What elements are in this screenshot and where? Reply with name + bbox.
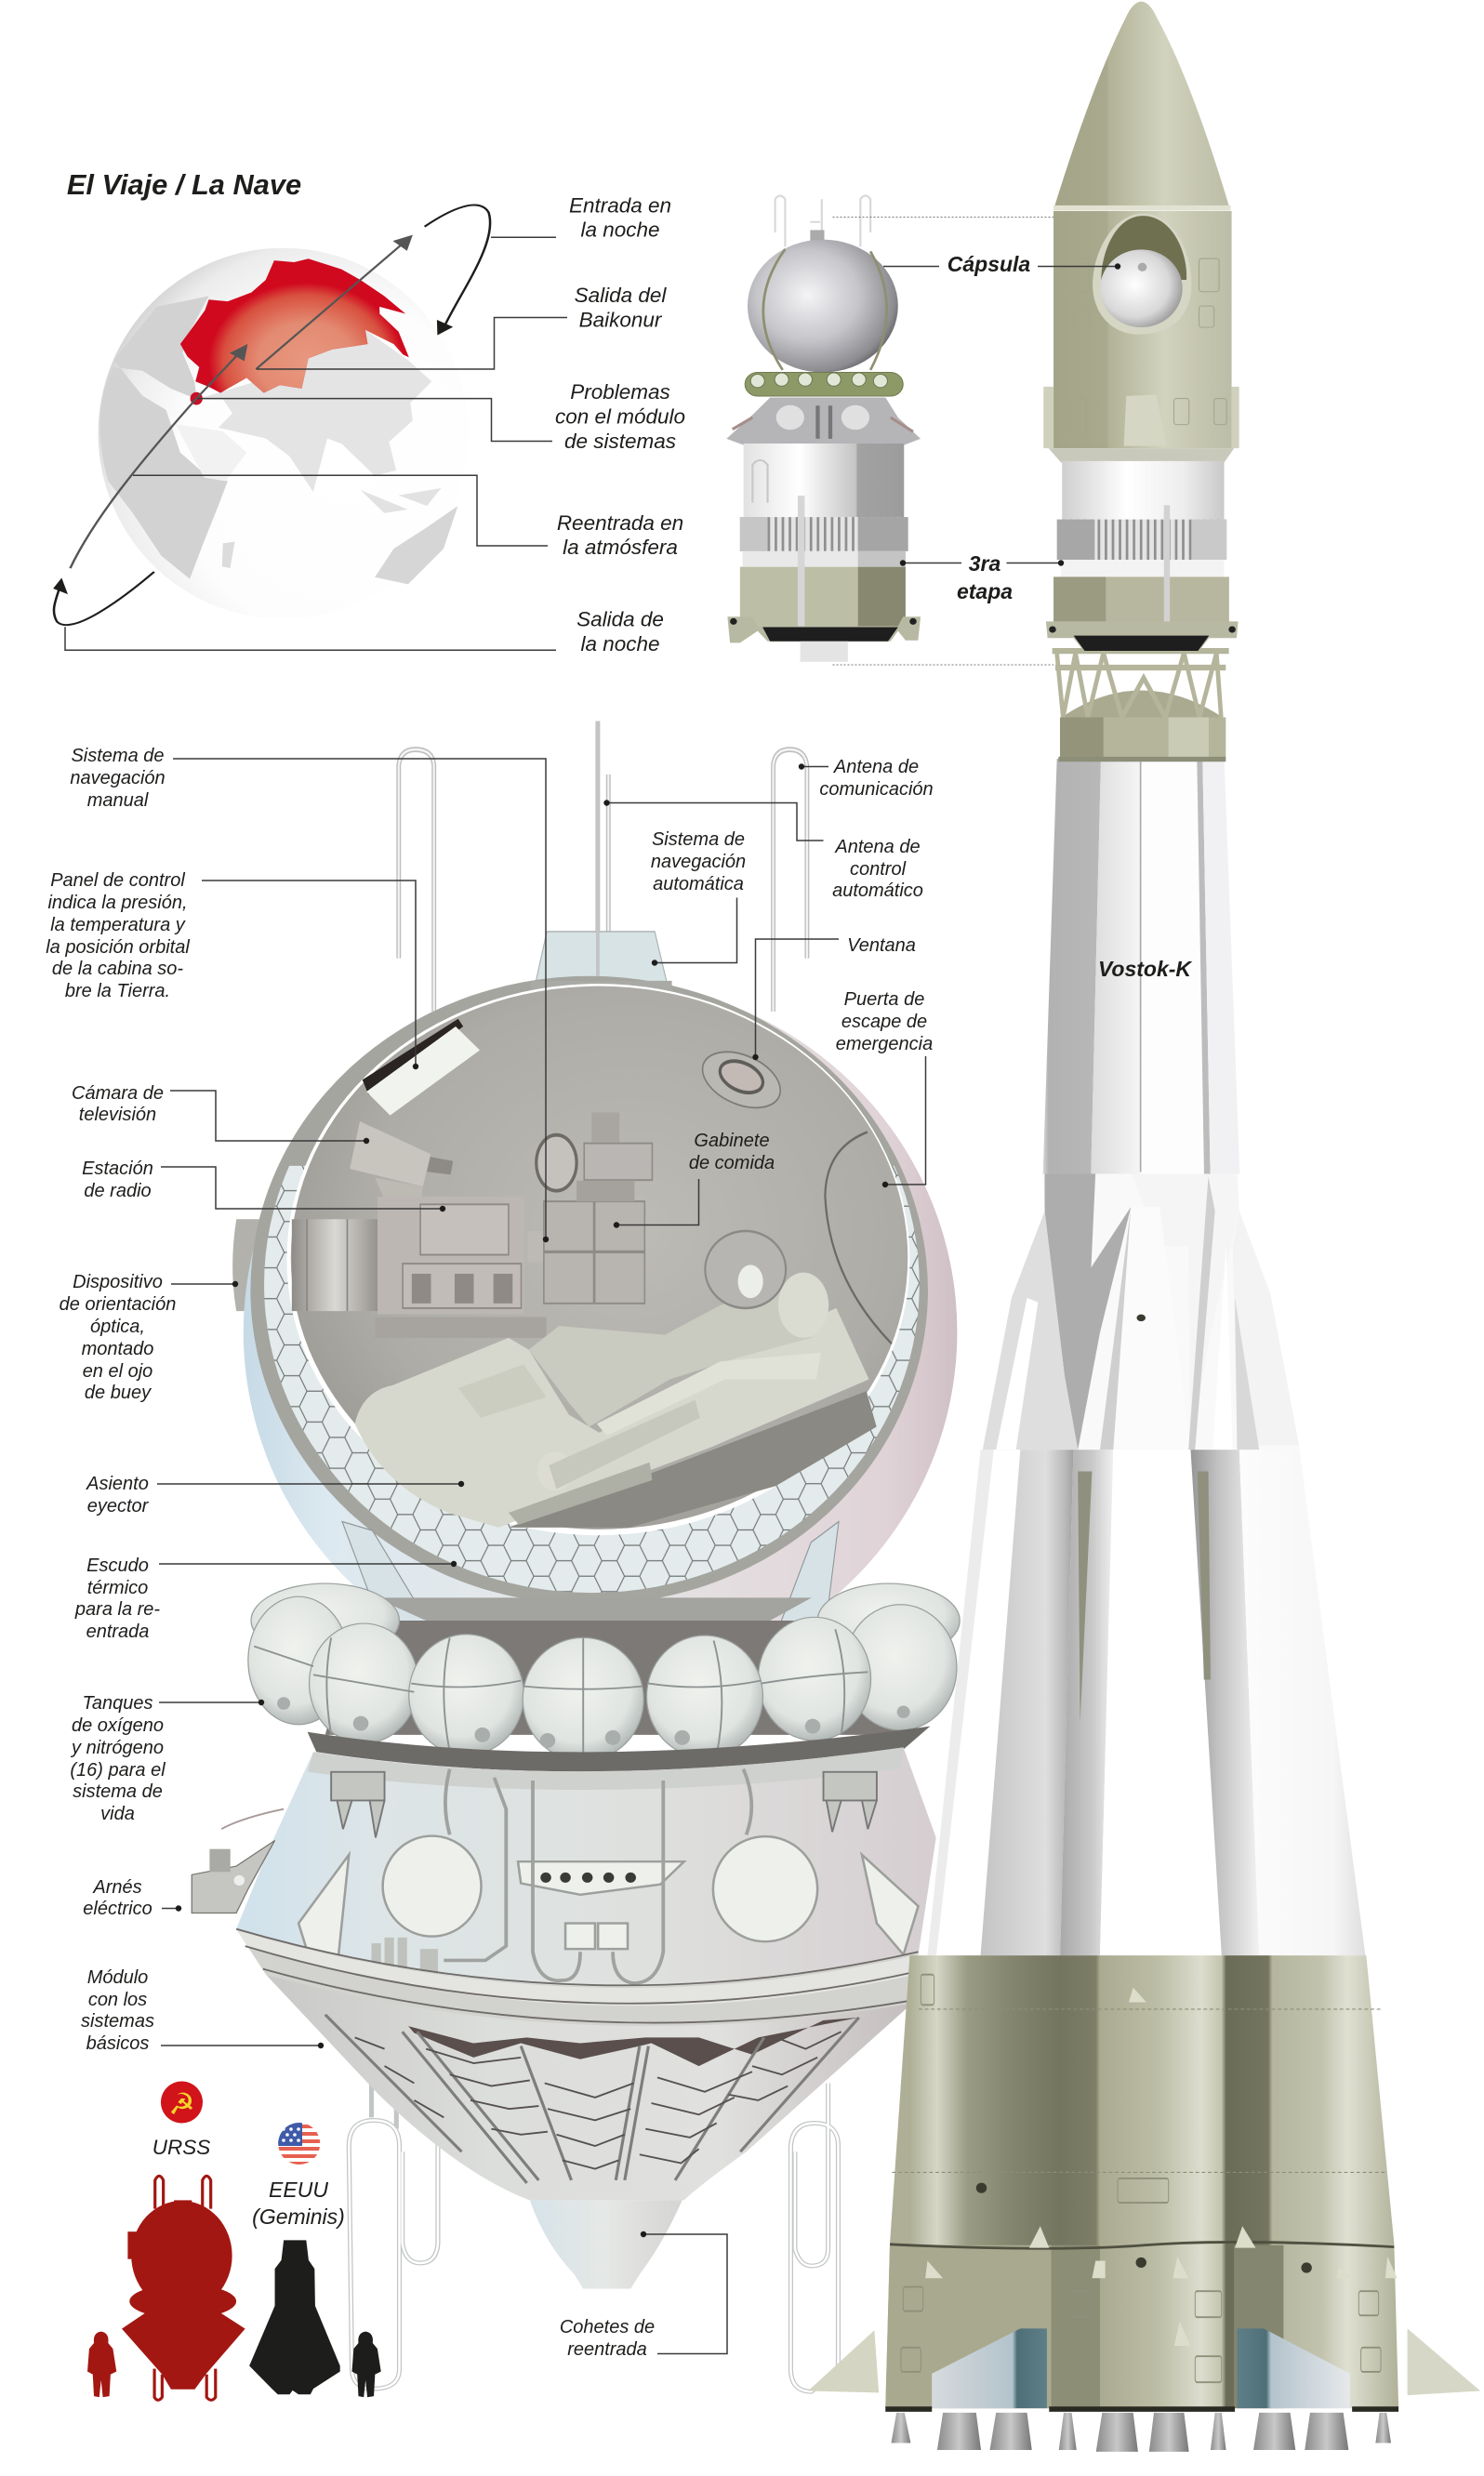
label: Sistema de navegación automática: navegación [651,852,746,872]
label: Sistema de navegación manual: manual [87,790,149,811]
emergency door [825,1132,892,1344]
label: Tanques: y nitrógeno [70,1738,164,1758]
label: Sistema de navegación automática: Sistema de [652,829,745,850]
nozzles [891,2413,1391,2452]
lower struts [342,1522,839,1622]
antennas [775,195,870,246]
label: Gabinete de comida: Gabinete [694,1131,770,1151]
label: Vostok-K: Vostok-K [1098,957,1192,981]
silhouette: astronaut [351,2332,381,2397]
navigation instrument [537,1112,652,1201]
silhouette: Vostok [122,2176,245,2400]
interior [291,986,908,1529]
middle cone module [236,1727,936,1988]
label: EEUU (Geminis): EEUU [269,2178,328,2202]
label: Puerta de escape de emergencia: emergencia [836,1034,933,1054]
label: Dispositivo de orientación óptica: montado [82,1339,153,1359]
rocket core stage [1043,759,1239,1174]
label: Problemas con el módulo de sistemas: Problemas [570,380,670,404]
label: Dispositivo de orientación óptica: óptica, [90,1317,145,1337]
label: Panel de control: la temperatura y [50,915,186,935]
label: Entrada en la noche: Entrada en [569,193,671,218]
label: Dispositivo de orientación óptica: Dispositivo [73,1272,163,1292]
label: Arnés eléctrico: Arnés [92,1877,142,1898]
icon: USSR flag [161,2081,203,2124]
label: Salida de la noche: la noche [580,632,660,655]
label: Salida de la noche: Salida de [576,608,664,630]
panel: tanks and base modules [192,1583,960,2391]
label: Dispositivo de orientación óptica: de buey [85,1383,152,1403]
label: 3ra etapa: etapa [957,579,1013,603]
label: Cohetes de reentrada: Cohetes de [560,2317,655,2337]
sphere shell [244,981,957,1683]
globe with USSR highlighted [99,248,469,618]
label: Tanques: sistema de [73,1781,163,1802]
label: Tanques: Tanques [82,1693,152,1714]
radio station [292,1197,571,1338]
label: Ventana: Ventana [847,935,916,956]
label: Arnés eléctrico: eléctrico [83,1899,152,1919]
title: El Viaje / La Nave [67,168,301,201]
label: URSS: URSS [152,2136,210,2159]
food cabinet [544,1201,644,1304]
leader lines and dots [157,218,1120,2354]
floor [509,1391,877,1528]
panel: rocket Vostok-K [808,2,1480,2452]
label: Tanques: de oxígeno [72,1715,164,1736]
ejection seat with cosmonaut [355,1231,869,1528]
panel: El Viaje globe diagram [53,168,685,655]
TV camera [350,1121,453,1208]
label: Sistema de navegación manual: Sistema de [71,746,165,766]
heat shield ring [250,976,928,1605]
rocket truss and collar [1053,651,1229,761]
label: Puerta de escape de emergencia: Puerta de [844,989,924,1010]
service module [726,398,921,662]
label: Problemas con el módulo de sistemas: con el módulo [555,405,685,428]
label: Panel de control: de la cabina so- [52,959,183,979]
label: Módulo con los sistemas básicos: con los [88,1990,147,2010]
label: Antena de comunicación: comunicación [819,779,934,800]
label: Asiento eyector: eyector [87,1496,150,1516]
label: Tanques: vida [100,1804,135,1824]
label: Panel de control: la posición orbital [46,937,190,958]
top hatch [534,722,669,1034]
label: Escudo térmico: Escudo [86,1556,149,1576]
reentry rockets nozzle [530,2200,682,2289]
fairing window with capsule [1093,214,1191,335]
label: Cohetes de reentrada: reentrada [567,2339,647,2360]
label: Gabinete de comida: de comida [689,1153,775,1173]
callout labels: capsule left [46,746,190,2054]
label: Módulo con los sistemas básicos: básicos [86,2033,149,2054]
label: Problemas con el módulo de sistemas: de sistemas [564,430,676,453]
globe leader lines [65,237,567,650]
label: Puerta de escape de emergencia: escape de [841,1012,927,1032]
antennas [399,722,807,1012]
window [696,1041,787,1119]
icon: problem burst [191,392,203,404]
oxygen tanks ring [745,373,903,396]
label: Cápsula: Cápsula [947,252,1030,276]
label: Sistema de navegación automática: automática [653,874,744,894]
label: Antena de comunicación: Antena de [833,757,919,777]
optical device [232,1219,269,1311]
icon: US flag [278,2123,321,2165]
label: EEUU (Geminis): (Geminis) [252,2205,345,2229]
wire loops [349,2055,838,2391]
label: Reentrada en la atmósfera: Reentrada en [557,511,683,535]
label: Antena de control automático: Antena de [834,837,921,857]
oxygen and nitrogen tanks [248,1583,960,1761]
rocket lower boosters [808,1172,1480,2452]
rocket fairing and third stage [1043,2,1239,651]
label: Cámara de televisión: Cámara de [72,1083,164,1104]
label: Sistema de navegación manual: navegación [70,768,166,788]
icon: USSR flag: ☭ [168,2086,195,2122]
label: Escudo térmico: para la re- [74,1599,160,1620]
label: Estación de radio: Estación [82,1159,153,1179]
label: Salida del Baikonur: Baikonur [579,309,663,331]
orbit arrows [53,205,490,625]
label: Dispositivo de orientación óptica: en el ojo [83,1361,152,1382]
label: 3ra etapa: 3ra [969,551,1000,576]
panel: Vostok spacecraft small view [726,195,921,662]
capsule sphere [748,230,898,373]
label: Módulo con los sistemas básicos: sistemas [81,2011,154,2032]
label: Cámara de televisión: televisión [79,1105,156,1125]
label: Tanques: (16) para el [70,1760,166,1781]
label: Panel de control: indica la presión, [47,893,188,913]
comparison: USSR vs USA silhouettes [87,2081,381,2400]
label: Reentrada en la atmósfera: la atmósfera [563,536,678,559]
label: Dispositivo de orientación óptica: de orientación [60,1294,176,1315]
label: Asiento eyector: Asiento [86,1474,149,1494]
label: Escudo térmico: entrada [86,1622,149,1642]
panel: capsule cutaway [232,722,957,1683]
lower module [236,1929,919,2200]
silhouette: cosmonaut [87,2332,116,2397]
silhouette: Gemini [249,2240,340,2394]
label: Antena de control automático: control [850,859,907,880]
callout labels: capsule right [560,252,1192,2360]
label: Módulo con los sistemas básicos: Módulo [87,1967,148,1988]
label: Panel de control: bre la Tierra. [65,981,170,1001]
label: Panel de control: Panel de control [50,870,185,891]
label: Antena de control automático: automático [832,881,923,901]
label: Estación de radio: de radio [84,1181,152,1201]
collar [376,1597,812,1621]
label: Escudo térmico: térmico [87,1578,148,1598]
label: Entrada en la noche: la noche [580,218,660,242]
electrical harness [192,1809,284,1913]
label: Salida del Baikonur: Salida del [575,284,667,307]
control panel [363,1019,480,1116]
